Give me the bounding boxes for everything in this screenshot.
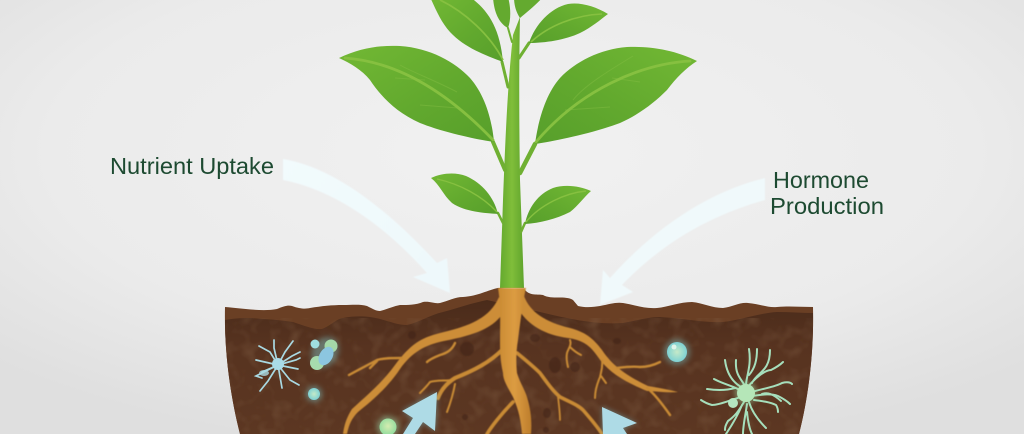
bubble: green lower left	[377, 416, 399, 434]
label: hormone production: Hormone	[773, 167, 869, 193]
leaf: top centre	[493, 0, 510, 28]
second right root	[517, 353, 602, 434]
soil cross-section	[220, 285, 820, 434]
label: nutrient uptake: Nutrient Uptake	[110, 153, 274, 179]
stem	[500, 17, 524, 288]
petioles	[493, 28, 535, 232]
bubble: right large	[664, 339, 690, 365]
arrow: nutrient uptake	[283, 159, 450, 293]
microbe: left blue	[256, 340, 300, 391]
right root branches	[617, 362, 670, 415]
leaf: upper right	[529, 3, 608, 43]
leaf: top right	[514, 0, 543, 18]
leaf: upper left	[430, 0, 503, 62]
leaf: small right	[525, 186, 591, 224]
nutrient bubbles: left cluster	[306, 332, 344, 402]
microbe: right green	[701, 349, 792, 434]
right main root	[519, 296, 678, 392]
arrow: hormone production	[600, 178, 765, 305]
soil clods	[408, 331, 621, 433]
left root branches	[349, 358, 402, 375]
leaf: small left	[431, 174, 498, 214]
root system	[343, 288, 678, 434]
plant shoot	[339, 0, 697, 288]
soil grain texture	[225, 318, 815, 434]
lower left root	[487, 402, 513, 434]
deep soil layer	[225, 300, 815, 434]
second left root	[438, 350, 502, 398]
taproot	[498, 288, 531, 434]
arrow: soil left	[402, 392, 437, 434]
leaf: large right	[535, 47, 697, 144]
topsoil layer	[220, 285, 820, 434]
leaf: large left	[339, 46, 494, 142]
left main root	[343, 297, 505, 434]
label: hormone production: Production	[770, 193, 884, 219]
arrow: soil right	[602, 407, 637, 434]
